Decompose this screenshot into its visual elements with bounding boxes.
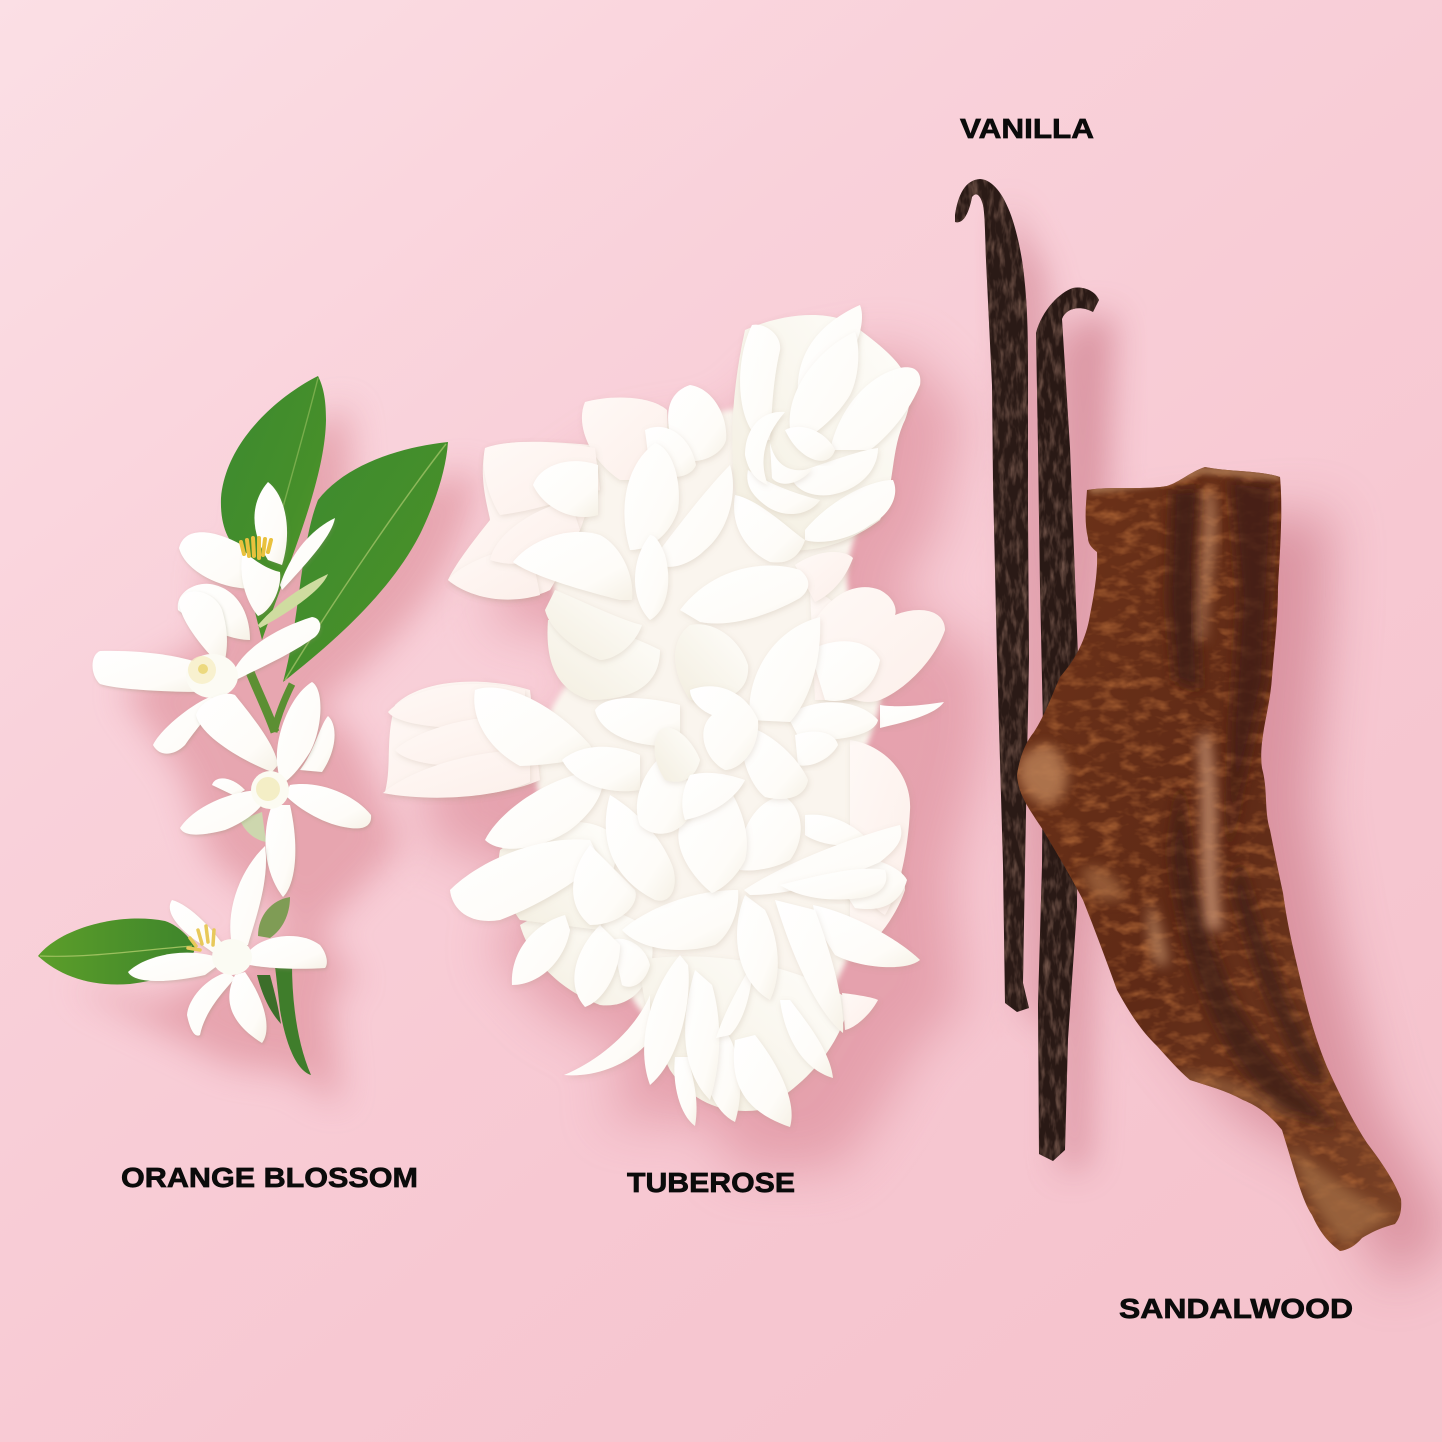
flower: third blossom (180, 682, 371, 897)
flower: top blossom (178, 482, 335, 640)
illustration: vanilla pods (955, 179, 1099, 1161)
label: tuberose: TUBEROSE (627, 1167, 795, 1198)
leaf: upper (221, 376, 326, 640)
flower: lower right (622, 825, 920, 1038)
vanilla pod: right (1036, 288, 1099, 1161)
flower: top centre (582, 385, 726, 480)
label: sandalwood: SANDALWOOD (1119, 1293, 1353, 1324)
flower: second blossom (92, 591, 320, 754)
illustration: sandalwood (1017, 467, 1401, 1251)
illustration: tuberose (383, 305, 945, 1127)
flower: far right (787, 587, 945, 915)
stems (250, 672, 311, 1075)
flower: top right (734, 305, 920, 563)
flower: bottom blossom (128, 846, 327, 1043)
sandalwood ridges and highlights (1018, 470, 1395, 1245)
flower: upper centre (513, 443, 853, 660)
vanilla pod: left (955, 179, 1029, 1012)
flower cluster base layer (385, 315, 910, 1111)
label: orange blossom: ORANGE BLOSSOM (121, 1162, 418, 1193)
leaf: right (283, 442, 448, 682)
illustration: orange blossom (38, 376, 448, 1075)
shadows (68, 201, 1442, 1287)
leaf: lower left (38, 918, 195, 984)
flower: centre (595, 617, 820, 901)
flower: far left (383, 684, 640, 849)
label: vanilla: VANILLA (960, 113, 1094, 144)
flower: bottom (564, 955, 878, 1127)
flower: left blush (448, 442, 600, 600)
flower: lower left (450, 839, 650, 1007)
